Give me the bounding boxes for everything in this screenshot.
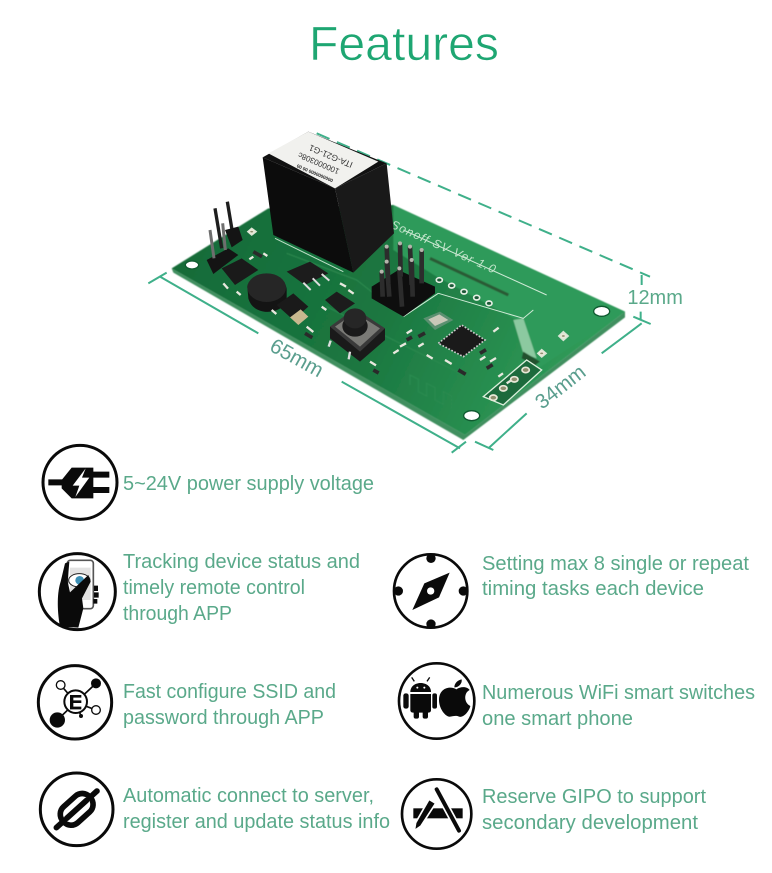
icon: plug [43, 445, 117, 519]
text: timing: Setting max 8 single or repeat [482, 553, 749, 575]
icon: hand holding phone [39, 554, 115, 630]
text: tracking: Tracking device status and [123, 551, 360, 573]
left pin header [207, 202, 243, 274]
text: configure: password through APP [123, 707, 324, 729]
text: configure [123, 681, 336, 729]
dimension: 65mm length [148, 273, 466, 453]
relay: 0000000000 00 00 [296, 163, 334, 183]
feature: fast configure [38, 666, 336, 739]
dimension: 34mm width [475, 323, 642, 450]
terminal pads [247, 227, 569, 405]
text: tracking: through APP [123, 603, 232, 625]
small component specks [223, 252, 511, 383]
six pin header [372, 241, 435, 317]
relay: 100000308c [297, 150, 341, 176]
text: switches: Numerous WiFi smart switches [482, 682, 755, 704]
text: connect: register and update status info [123, 811, 390, 833]
text: development: secondary development [482, 812, 698, 834]
text: tracking [123, 551, 360, 625]
icon: app tools [402, 779, 471, 849]
icon: android and apple [399, 663, 474, 739]
tactile button [329, 308, 385, 362]
text: switches: one smart phone [482, 708, 633, 730]
text: configure: Fast configure SSID and [123, 681, 336, 703]
silkscreen lines [403, 230, 547, 318]
icon: compass [394, 554, 468, 629]
icon: chain link [40, 773, 113, 846]
feature: GPIO development [402, 779, 706, 849]
dimension: 12mm height and dashed top line: 12mm [627, 287, 683, 309]
mounting holes [185, 261, 610, 421]
relay [263, 132, 394, 273]
text: voltage: 5~24V power supply voltage [123, 473, 374, 495]
main chip [438, 325, 485, 357]
product diagram: circuit board with dimensions [148, 132, 683, 453]
text: timing: timing tasks each device [482, 578, 704, 600]
text: development [482, 786, 706, 834]
feature: timing tasks [394, 553, 749, 629]
through-hole pad row [436, 278, 492, 306]
text: tracking: timely remote control [123, 577, 305, 599]
relay: ITA-G21-G1 [307, 143, 354, 170]
feature: numerous switches [399, 663, 755, 739]
dimension: 34mm width: 34mm [531, 360, 590, 414]
text: switches [482, 682, 755, 730]
feature: automatic connect [40, 773, 390, 846]
feature: remote tracking [39, 551, 360, 630]
circuit board photo [172, 132, 625, 440]
surface mount chips and inductor [222, 258, 453, 330]
dimension: 12mm height and dashed top line [317, 133, 683, 324]
feature: power supply [43, 445, 374, 519]
text: connect: Automatic connect to server, [123, 785, 374, 807]
silkscreen label: Sonoff SV Ver 1.0 [389, 217, 498, 276]
icon: network hub [38, 666, 112, 739]
text: development: Reserve GIPO to support [482, 786, 706, 808]
text: timing [482, 553, 749, 600]
text: connect [123, 785, 390, 833]
title: Features [309, 18, 499, 71]
dimension: 65mm length: 65mm [266, 334, 327, 382]
